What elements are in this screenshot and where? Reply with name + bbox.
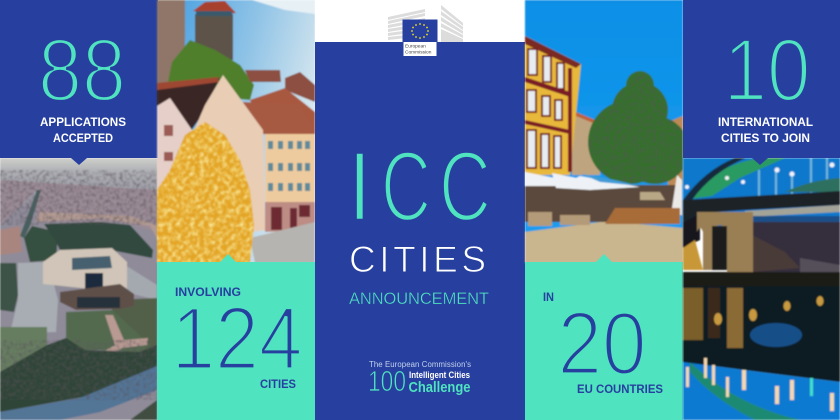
title: ICC: I (346, 130, 374, 242)
panel: aerial city photo (0, 158, 158, 420)
label: international cities to join: CITIES TO JOIN (721, 131, 810, 145)
panel: central title column (315, 0, 525, 420)
logo: 100 Intelligent Cities Challenge: The European Commission's (369, 360, 471, 369)
panel: teal stat box 20 EU countries (525, 254, 683, 420)
label: in: IN (543, 290, 554, 304)
panel: old town photo (157, 0, 315, 265)
panel: teal stat box 124 cities (157, 254, 315, 420)
icon: European Commission logo: Commission (405, 50, 432, 56)
panel: blue stat box 10 international cities (683, 0, 840, 165)
logo: 100 Intelligent Cities Challenge: Challenge (408, 380, 470, 396)
label: EU countries: EU COUNTRIES (577, 382, 663, 396)
logo: 100 Intelligent Cities Challenge: Intelligent Cities (409, 370, 470, 381)
logo: 100 Intelligent Cities Challenge (368, 360, 471, 398)
label: involving: INVOLVING (175, 285, 241, 299)
title: ICC: C (381, 130, 431, 242)
panel: blue stat box 88 applications (0, 0, 158, 165)
label: international cities to join: INTERNATIONAL (718, 115, 814, 129)
title: ICC (346, 130, 491, 242)
title: CITIES: CITIES (349, 239, 486, 280)
label: cities: CITIES (260, 377, 296, 391)
icon: European Commission logo (388, 5, 463, 56)
title: ICC: C (439, 130, 491, 242)
label: applications accepted (40, 115, 126, 145)
label: applications accepted: APPLICATIONS (40, 115, 126, 129)
panel: night bridge photo (683, 158, 840, 420)
logo: 100 Intelligent Cities Challenge: 100 (368, 366, 406, 398)
number 124: 124 (172, 288, 302, 388)
label: applications accepted: ACCEPTED (53, 131, 113, 145)
panel: town square photo (525, 0, 683, 263)
number 88: 88 (38, 20, 126, 120)
number 20: 20 (558, 293, 646, 393)
label: international cities to join (718, 115, 814, 145)
number 10: 10 (724, 20, 810, 120)
title: announcement: ANNOUNCEMENT (349, 290, 489, 308)
icon: European Commission logo: European (405, 44, 426, 50)
